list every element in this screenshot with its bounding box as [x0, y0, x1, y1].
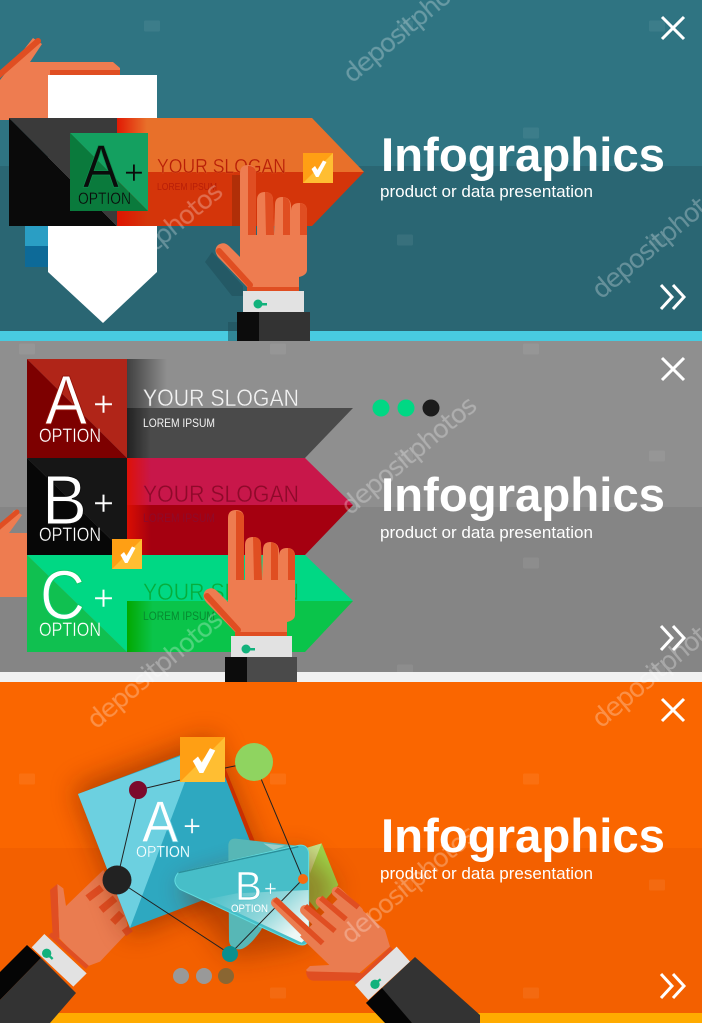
middle panel: suit sleeve — [225, 657, 297, 682]
bottom panel: next chevrons — [661, 974, 684, 998]
panel: orange banner background — [0, 682, 702, 1023]
bottom panel: blue A+ square: + — [183, 808, 201, 843]
middle panel: option tile C: + — [93, 577, 114, 618]
top panel: close icon — [662, 17, 684, 39]
middle panel: close icon — [662, 358, 684, 380]
middle panel: option tile B: B — [42, 461, 87, 539]
middle panel: slogan C — [143, 579, 299, 623]
middle panel: slogan C: LOREM IPSUM — [143, 609, 215, 623]
top panel: title: Infographics — [381, 128, 665, 181]
middle panel: option tile A: A — [45, 361, 87, 439]
top panel: slogan text: YOUR SLOGAN — [157, 156, 286, 178]
bottom panel: check badge — [180, 737, 225, 782]
bottom panel: left hand — [32, 870, 131, 987]
panel: gray banner background — [0, 341, 702, 682]
top panel: hand shadow — [205, 175, 243, 341]
top panel: green A+ option tile: OPTION — [78, 190, 131, 208]
top panel: subtitle: product or data presentation — [380, 183, 593, 201]
middle panel: pointing hand — [204, 510, 295, 657]
middle panel: subtitle: product or data presentation — [380, 524, 593, 542]
top panel: white pointer shape — [48, 75, 157, 323]
top panel: check badge — [303, 153, 333, 183]
middle panel: check badge — [112, 539, 142, 569]
middle panel: slogan A — [143, 385, 299, 430]
bottom panel: right hand — [275, 889, 410, 1000]
middle panel: slogan B: LOREM IPSUM — [143, 511, 215, 525]
bottom panel: shadow of triangles — [178, 848, 338, 958]
top panel: left hand holding the banner — [0, 38, 120, 120]
middle panel: slogan A: LOREM IPSUM — [143, 416, 215, 430]
top panel: blue tab — [25, 226, 48, 267]
top panel: green A+ option tile — [70, 133, 148, 211]
bottom panel: left suit sleeve — [0, 945, 76, 1023]
middle panel: slogan C: YOUR SLOGAN — [143, 579, 299, 606]
middle panel: pagination dots — [372, 400, 440, 416]
middle panel: option tile B: OPTION — [39, 525, 101, 546]
bottom panel: blue A+ square: A — [142, 790, 178, 855]
middle panel: option tile A: OPTION — [39, 426, 101, 447]
watermark text: depositphotos — [81, 604, 229, 735]
bottom panel: shadow of A square — [74, 735, 270, 935]
top panel: pointing hand — [216, 165, 307, 312]
top panel: dark label box — [9, 118, 117, 226]
middle panel: option tile B — [27, 458, 127, 555]
bottom panel: blue A+ square — [78, 743, 268, 928]
middle panel: title: Infographics — [381, 468, 665, 521]
top panel: green A+ option tile: + — [124, 154, 144, 192]
bottom panel: subtitle: product or data presentation — [380, 865, 593, 883]
bottom panel: green folded shape — [305, 843, 338, 910]
top panel: green A+ option tile: A — [83, 133, 119, 200]
middle panel: option tile A — [27, 359, 127, 458]
bottom panel: front triangle with B+ — [175, 845, 309, 945]
watermark text: depositphotos — [335, 390, 483, 521]
top panel: next chevrons — [661, 285, 684, 309]
middle panel: slogan B — [143, 481, 299, 525]
middle panel: gray arrow A — [127, 359, 353, 458]
middle panel: option tile A: + — [93, 383, 114, 424]
middle panel: option tile B: + — [93, 482, 114, 523]
top panel: slogan text: LOREM IPSUM — [157, 182, 217, 193]
bottom panel: front triangle with B+: OPTION — [231, 903, 268, 915]
bottom panel: title: Infographics — [381, 809, 665, 862]
bottom panel: right suit sleeve — [366, 957, 480, 1023]
bottom panel: network lines — [117, 762, 303, 954]
bottom panel: network nodes — [102, 743, 308, 962]
bottom panel: close icon — [662, 699, 684, 721]
bottom panel: back teal triangle — [228, 839, 306, 949]
bottom panel: pagination dots — [173, 968, 234, 984]
middle panel: left hand stub — [0, 510, 27, 597]
panel: teal banner background — [0, 0, 702, 341]
watermark text: depositphotos — [335, 819, 483, 950]
middle panel: next chevrons — [661, 626, 684, 650]
middle panel: green arrow C — [127, 555, 353, 652]
middle panel: option tile C: C — [40, 556, 85, 634]
middle panel: slogan A: YOUR SLOGAN — [143, 385, 299, 412]
middle panel: slogan B: YOUR SLOGAN — [143, 481, 299, 508]
middle panel: option tile C — [27, 555, 127, 652]
middle panel: option tile C: OPTION — [39, 620, 101, 641]
top panel: suit sleeve — [237, 312, 310, 341]
top panel: orange arrow — [117, 118, 364, 226]
bottom panel: front triangle with B+: + — [264, 876, 277, 901]
bottom panel: front triangle with B+: B — [235, 863, 262, 909]
bottom panel: blue A+ square: OPTION — [136, 844, 190, 861]
watermark text: depositphotos — [81, 176, 229, 307]
top panel: slogan text — [157, 156, 286, 193]
middle panel: red arrow B — [127, 458, 353, 555]
